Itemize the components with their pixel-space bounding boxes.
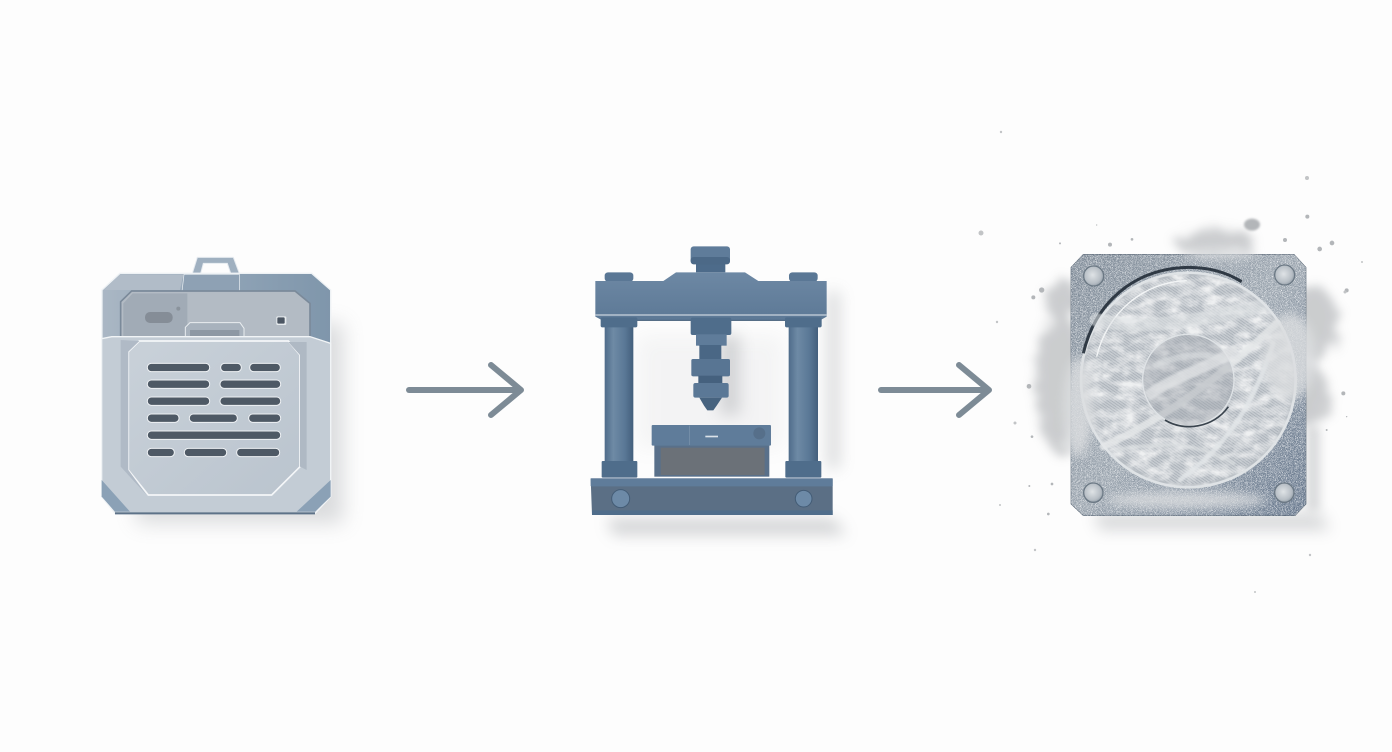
centre tab [185, 323, 244, 337]
arrow: cartridge to press [409, 365, 521, 415]
plate speckle [1071, 254, 1306, 516]
crossbeam [595, 272, 827, 320]
mould [652, 425, 771, 477]
plate shadow [1093, 513, 1330, 530]
cartridge front panel [102, 337, 331, 513]
right column [785, 317, 822, 478]
inner circle [1143, 334, 1237, 427]
powder cloud [1035, 229, 1338, 453]
top bolts [605, 272, 818, 282]
left column [601, 317, 637, 478]
arrow: press to finished part [881, 365, 989, 415]
icon: filter cartridge [102, 257, 343, 523]
press shadow [637, 335, 783, 448]
corner bevels [102, 480, 130, 512]
small indicator [276, 316, 286, 325]
cartridge window [121, 291, 310, 337]
circular recess [1081, 267, 1296, 487]
inner vent plate [128, 341, 300, 495]
powder particles [1027, 215, 1349, 515]
scattered far particles [978, 131, 1363, 593]
cartridge shadow [127, 323, 343, 523]
status pill [145, 312, 173, 323]
press base [591, 478, 833, 515]
icon: finished plate with powder [1027, 215, 1349, 530]
ram [691, 318, 731, 410]
metal plate [1071, 254, 1306, 516]
top knob [691, 246, 730, 272]
vent slots [147, 363, 281, 457]
powder drift over plate [1063, 247, 1317, 509]
cartridge body [102, 273, 331, 513]
cartridge handle [192, 257, 239, 273]
icon: hydraulic press [591, 246, 847, 535]
corner rivets [1084, 265, 1295, 502]
